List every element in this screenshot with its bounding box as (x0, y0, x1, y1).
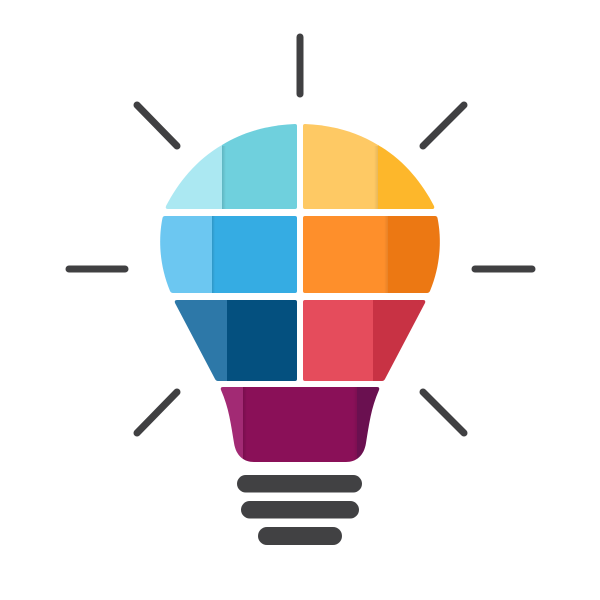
panel: middle right segment (303, 216, 440, 293)
infographic: light bulb (66, 34, 536, 545)
panel: top right segment (303, 124, 434, 209)
icon: screw base bars (237, 475, 362, 545)
panel: lower left segment (175, 300, 297, 381)
panel: lower right segment (303, 300, 425, 381)
rays (69, 37, 532, 433)
panel: middle left segment (160, 216, 297, 293)
panel: top left segment (166, 124, 297, 209)
panel: bulb base segment (220, 387, 380, 462)
